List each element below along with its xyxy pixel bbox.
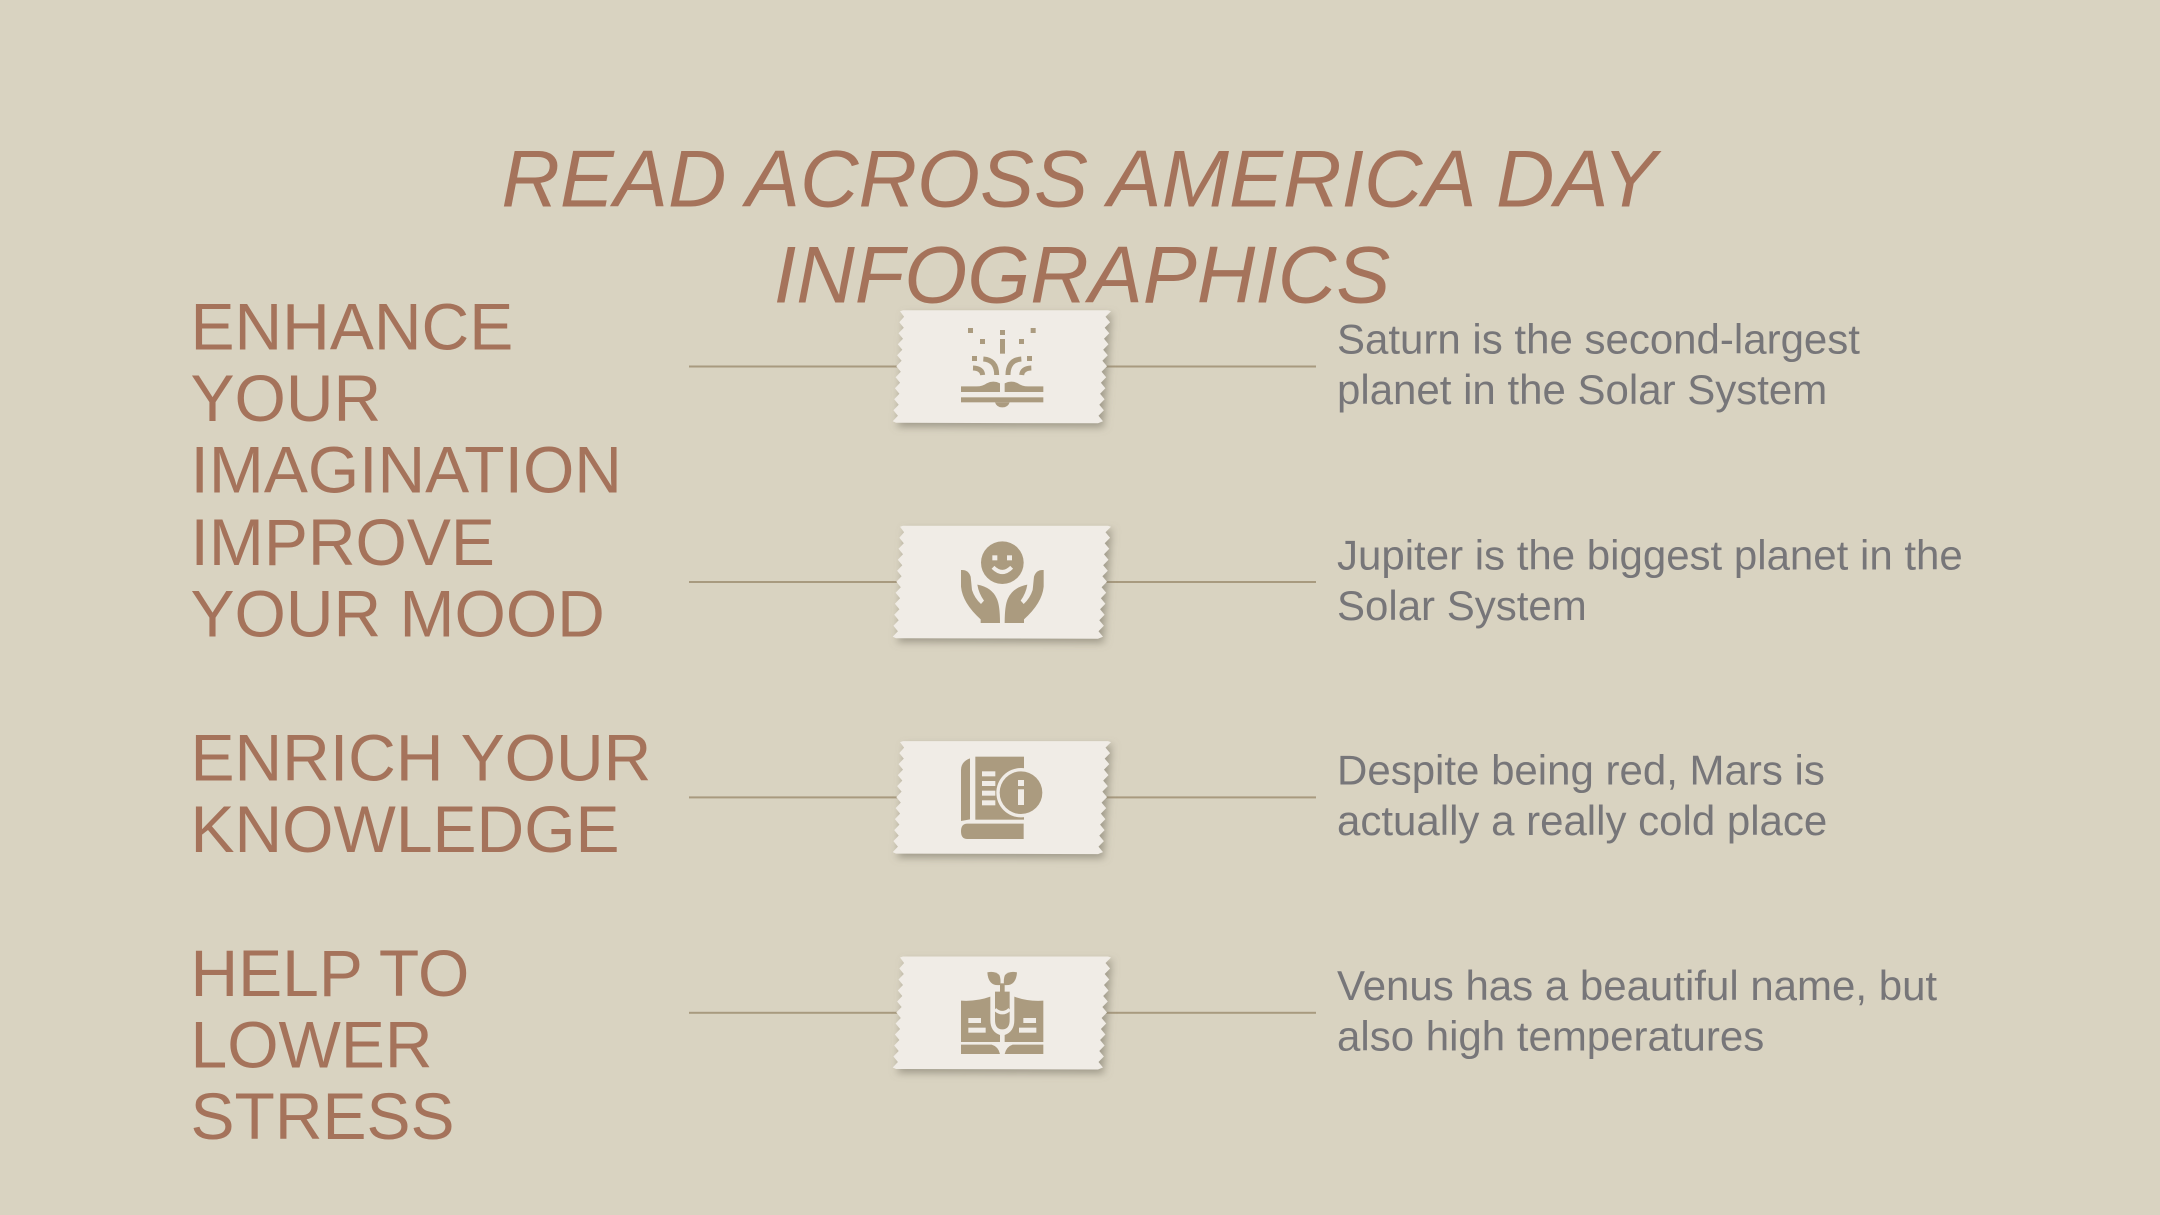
ticket with smiling face in hands icon <box>893 526 1114 643</box>
description: Jupiter <box>1337 531 1963 629</box>
description: Saturn: Saturn is the second-largest <box>1337 316 1860 362</box>
icon: hands holding smile <box>961 541 1044 623</box>
heading: improve your mood: IMPROVE <box>190 505 495 579</box>
description: Mars: actually a really cold place <box>1337 797 1827 844</box>
description: Jupiter: Solar System <box>1337 582 1587 629</box>
description: Venus: Venus has a beautiful name, but <box>1337 962 1937 1009</box>
ticket with sprouting book icon <box>893 956 1114 1074</box>
title: READ ACROSS AMERICA DAY <box>501 134 1662 224</box>
description: Saturn <box>1337 316 1860 413</box>
icon: book with sprout <box>961 972 1043 1054</box>
heading: enrich your knowledge <box>190 720 651 866</box>
connector line row 2 <box>689 581 1316 583</box>
connector line row 4 <box>689 1012 1316 1014</box>
title <box>501 134 1662 320</box>
heading: enrich your knowledge: ENRICH YOUR <box>190 720 651 794</box>
description: Mars: Despite being red, Mars is <box>1337 747 1825 794</box>
heading: help to lower stress: LOWER <box>190 1008 433 1082</box>
description: Jupiter: Jupiter is the biggest planet in the <box>1337 531 1963 578</box>
heading: enhance your imagination: ENHANCE <box>190 290 513 364</box>
ticket with book and sparks icon <box>893 310 1114 427</box>
heading: help to lower stress <box>190 936 469 1153</box>
description: Saturn: planet in the Solar System <box>1337 366 1827 413</box>
heading: enhance your imagination <box>190 290 622 506</box>
ticket with info book icon <box>893 741 1114 858</box>
description: Venus <box>1337 962 1937 1060</box>
heading: help to lower stress: STRESS <box>190 1079 455 1153</box>
icon: open book with sparks <box>961 328 1043 407</box>
description: Mars <box>1337 747 1827 844</box>
heading: improve your mood <box>190 505 605 650</box>
heading: improve your mood: YOUR MOOD <box>190 576 605 650</box>
heading: enrich your knowledge: KNOWLEDGE <box>190 792 620 866</box>
connector line row 1 <box>689 366 1316 368</box>
heading: enhance your imagination: IMAGINATION <box>190 432 622 506</box>
heading: help to lower stress: HELP TO <box>190 936 469 1010</box>
title: INFOGRAPHICS <box>774 230 1390 320</box>
heading: enhance your imagination: YOUR <box>190 361 381 435</box>
icon: book with info badge <box>961 757 1046 839</box>
description: Venus: also high temperatures <box>1337 1013 1764 1060</box>
connector line row 3 <box>689 796 1316 798</box>
